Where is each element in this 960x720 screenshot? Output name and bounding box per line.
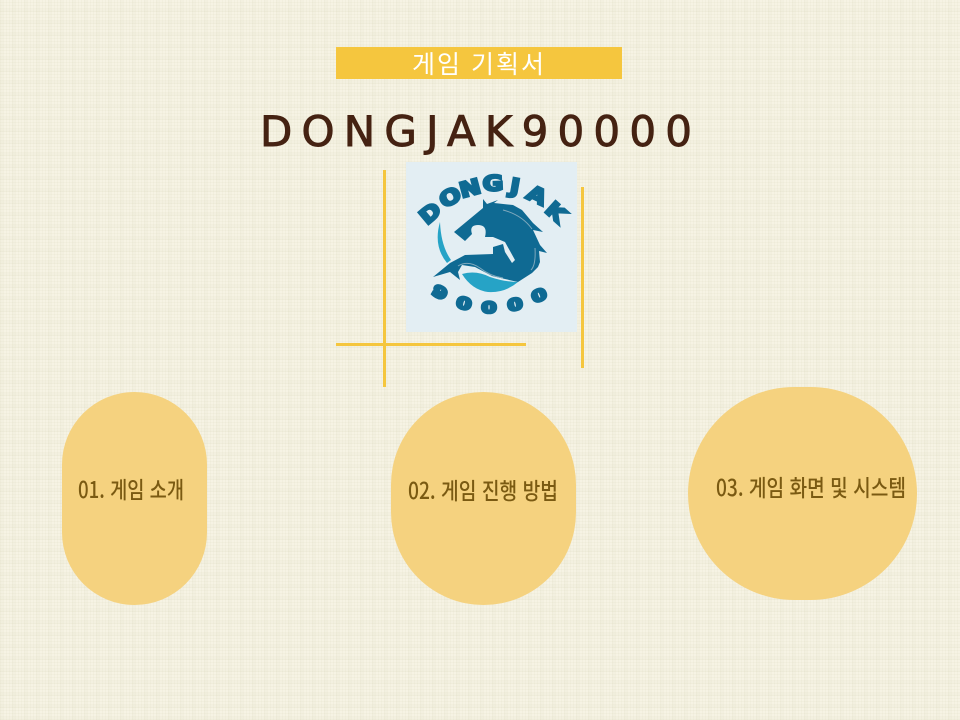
logo highlights [458, 210, 535, 278]
menu item 03: 03. 게임 화면 및 시스템 [716, 469, 906, 503]
logo lettering: 90000 [428, 281, 550, 317]
logo lettering: DONGJAK: O [435, 182, 466, 213]
menu item 03 [688, 387, 917, 600]
accent line: horizontal [336, 343, 526, 346]
logo lettering: DONGJAK: K [540, 197, 572, 229]
logo lettering: 90000: 0 [454, 293, 473, 315]
logo lettering: DONGJAK [415, 171, 572, 230]
menu item 01 [62, 392, 207, 605]
logo: DONGJAK 90000 horse emblem [406, 162, 577, 332]
logo crescent and swoosh [438, 222, 518, 292]
menu item 02 [391, 392, 576, 605]
logo lettering: DONGJAK: N [457, 174, 484, 203]
logo lettering: DONGJAK: D [415, 197, 446, 230]
logo lettering: 90000: 0 [481, 299, 497, 317]
logo lettering: 90000: 0 [506, 294, 524, 316]
menu item 01: 01. 게임 소개 [78, 471, 184, 505]
logo lettering: 90000: 9 [428, 281, 451, 305]
logo lettering: DONGJAK: G [482, 171, 504, 196]
menu item 02: 02. 게임 진행 방법 [408, 472, 558, 506]
logo lettering: DONGJAK: J [506, 173, 522, 200]
title: DONGJAK90000: DONGJAK90000 [260, 107, 692, 156]
logo lettering: DONGJAK: A [523, 180, 551, 211]
heading banner: 게임 기획서: 게임 기획서 [412, 45, 544, 81]
logo lettering: 90000: 0 [529, 284, 550, 307]
heading banner: 게임 기획서 [336, 45, 622, 81]
logo horse silhouette with rider cut-out [433, 199, 547, 282]
accent line: left vertical [383, 170, 386, 387]
accent line: right vertical [581, 187, 584, 368]
